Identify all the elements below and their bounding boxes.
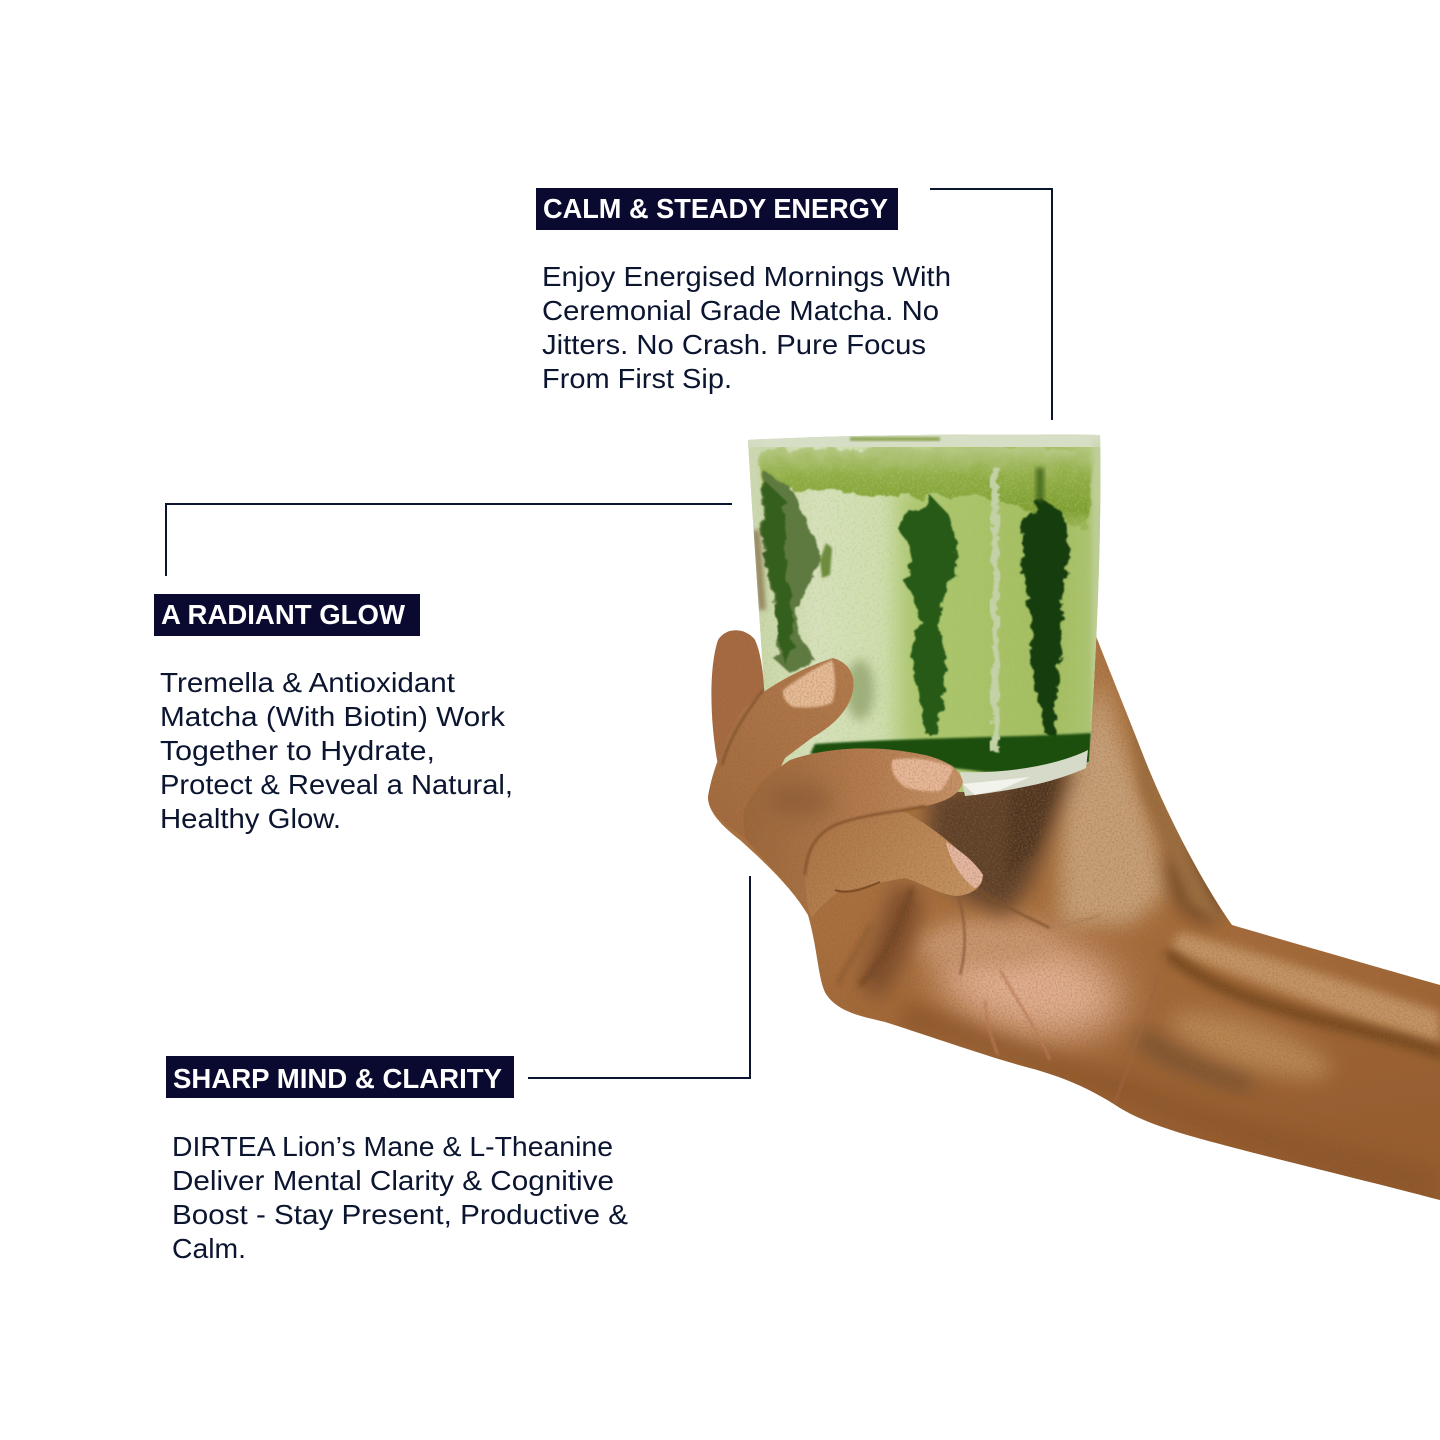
connector line: sharp mind and clarity: [528, 876, 750, 1078]
connector line: a radiant glow: [166, 504, 732, 576]
matcha glass: [745, 430, 1105, 800]
heading: a radiant glow: [154, 594, 420, 636]
text block: sharp mind and clarity: DIRTEA Lion’s Mane & L-Theanine: [172, 1131, 613, 1162]
text block: calm and steady energy: [542, 261, 951, 394]
thumb: [708, 658, 854, 838]
fingers: [708, 630, 983, 985]
connector line: calm and steady energy: [930, 189, 1052, 420]
sediment band: [810, 733, 1092, 774]
callout: sharp mind and clarity: [166, 1056, 628, 1264]
light vertical streak: [991, 465, 999, 752]
heading: a radiant glow: A RADIANT GLOW: [161, 599, 406, 630]
back finger: [711, 630, 765, 775]
text block: sharp mind and clarity: [172, 1131, 628, 1264]
dark streak: left: [760, 470, 820, 673]
text block: a radiant glow: Protect & Reveal a Natural,: [160, 769, 513, 800]
text block: sharp mind and clarity: Calm.: [172, 1233, 246, 1264]
text block: sharp mind and clarity: Deliver Mental Clarity & Cognitive: [172, 1165, 614, 1196]
text block: calm and steady energy: Ceremonial Grade Matcha. No: [542, 295, 939, 326]
illustration: hand holding matcha glass: [708, 430, 1440, 1210]
text block: calm and steady energy: Enjoy Energised Mornings With: [542, 261, 951, 292]
third finger: [800, 811, 983, 985]
callout: calm and steady energy: [536, 188, 951, 394]
dark streak: centre: [897, 498, 958, 735]
middle finger: [743, 748, 963, 910]
text block: a radiant glow: Healthy Glow.: [160, 803, 341, 834]
text block: calm and steady energy: Jitters. No Crash. Pure Focus: [542, 329, 926, 360]
heading: sharp mind and clarity: SHARP MIND & CLARITY: [173, 1063, 502, 1094]
text block: calm and steady energy: From First Sip.: [542, 363, 732, 394]
text block: a radiant glow: Tremella & Antioxidant: [160, 667, 455, 698]
heading: calm and steady energy: CALM & STEADY ENERGY: [543, 193, 888, 224]
hand and forearm: [708, 632, 1440, 1210]
callout: a radiant glow: [154, 594, 513, 834]
dark streak: right: [1022, 497, 1070, 735]
text block: a radiant glow: Together to Hydrate,: [160, 735, 435, 766]
text block: sharp mind and clarity: Boost - Stay Present, Productive &: [172, 1199, 628, 1230]
foam band: [758, 445, 1092, 530]
text block: a radiant glow: Matcha (With Biotin) Work: [160, 701, 506, 732]
text block: a radiant glow: [160, 667, 513, 834]
